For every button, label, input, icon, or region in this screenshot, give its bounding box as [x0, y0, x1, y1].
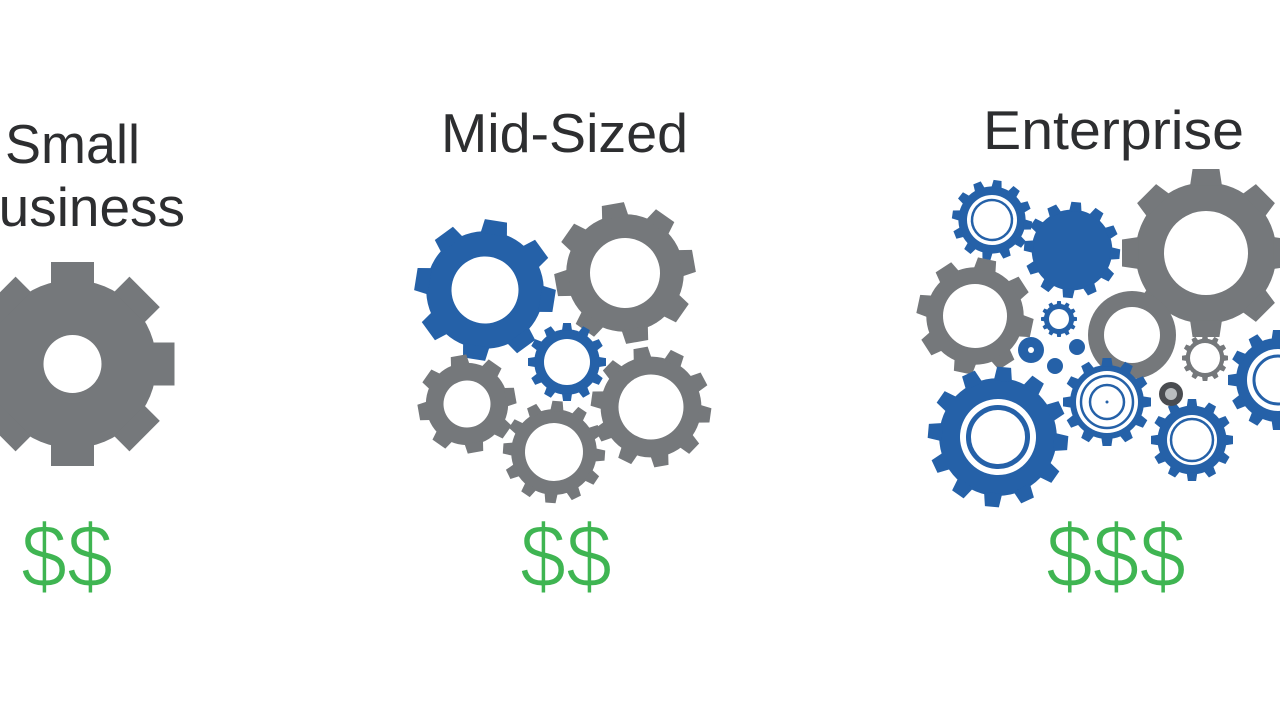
- price: three dollars: $$$: [1046, 507, 1186, 607]
- column: enterprise: [906, 99, 1280, 607]
- heading: enterprise: Enterprise: [983, 99, 1244, 161]
- icon: single gray gear: [0, 262, 175, 466]
- heading: small business: [0, 113, 185, 238]
- price: two dollars: $$: [520, 507, 612, 607]
- column: mid-sized: [405, 102, 720, 607]
- heading: small business: Small: [5, 113, 140, 175]
- column: small business: [0, 113, 185, 607]
- icon: enterprise gear cluster: [906, 169, 1280, 513]
- price: two dollars: $$: [21, 507, 113, 607]
- heading: mid-sized: Mid-Sized: [441, 102, 688, 164]
- icon: mid-sized gear cluster: [405, 192, 720, 506]
